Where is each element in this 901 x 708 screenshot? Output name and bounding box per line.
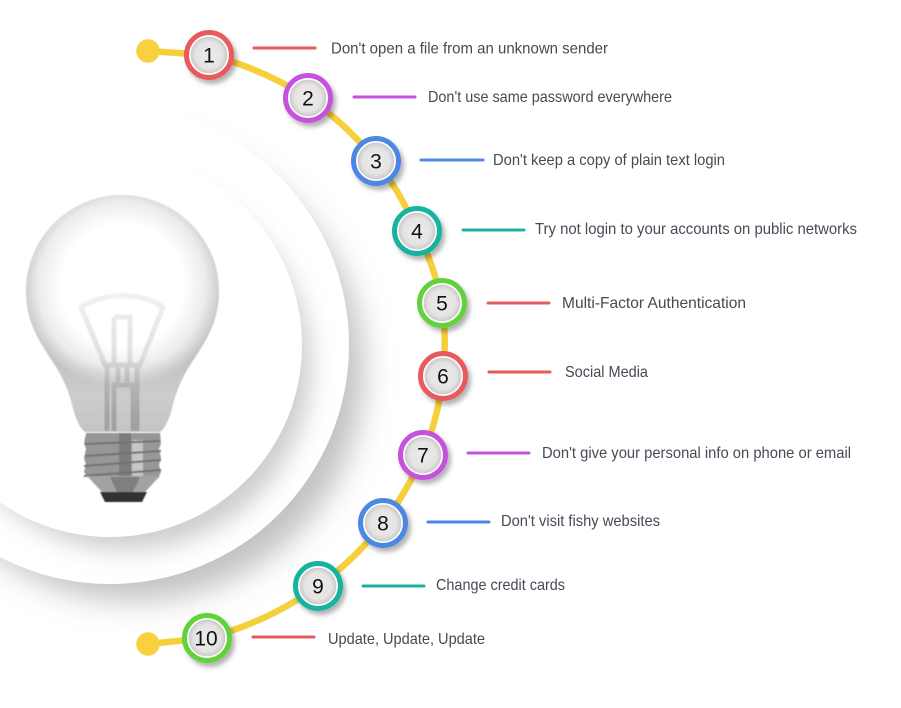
step 1: 1 (203, 44, 215, 68)
step 10: Update, Update, Update (328, 631, 485, 648)
step 6: Social Media (565, 364, 648, 381)
base cap (100, 492, 147, 502)
step 5: 5 (436, 292, 448, 316)
background rings with soft shadow (0, 106, 364, 601)
step 8 (360, 500, 660, 546)
step 3: Don't keep a copy of plain text login (493, 152, 725, 169)
step 7: Don't give your personal info on phone or email (542, 445, 851, 462)
step 4: Try not login to your accounts on public networks (535, 221, 857, 238)
step 7 (400, 432, 851, 478)
step 8: Don't visit fishy websites (501, 513, 660, 530)
icon: light bulb (26, 195, 219, 502)
step 7: 7 (417, 444, 429, 468)
screw base (84, 433, 161, 502)
step 2: Don't use same password everywhere (428, 89, 672, 106)
step 5: Multi-Factor Authentication (562, 295, 746, 312)
step 3: 3 (370, 150, 382, 174)
step 3 (354, 138, 725, 184)
bulb glass (26, 195, 219, 432)
step 1 (186, 32, 609, 78)
step 2 (286, 76, 672, 120)
step 9: Change credit cards (436, 577, 565, 594)
step 9: 9 (312, 576, 324, 598)
step 2: 2 (302, 88, 314, 110)
step 6: 6 (437, 366, 449, 388)
step 8: 8 (377, 512, 389, 536)
step 10 (184, 616, 485, 660)
step 10: 10 (194, 628, 218, 650)
filament (81, 296, 163, 431)
step 4: 4 (411, 220, 423, 244)
step 1: Don't open a file from an unknown sender (331, 40, 609, 58)
step 6 (420, 354, 648, 398)
step 4 (394, 208, 857, 254)
step 5 (420, 280, 746, 326)
bulb neck shading (53, 362, 192, 432)
step 9 (296, 564, 565, 608)
yellow timeline path (140, 42, 445, 652)
